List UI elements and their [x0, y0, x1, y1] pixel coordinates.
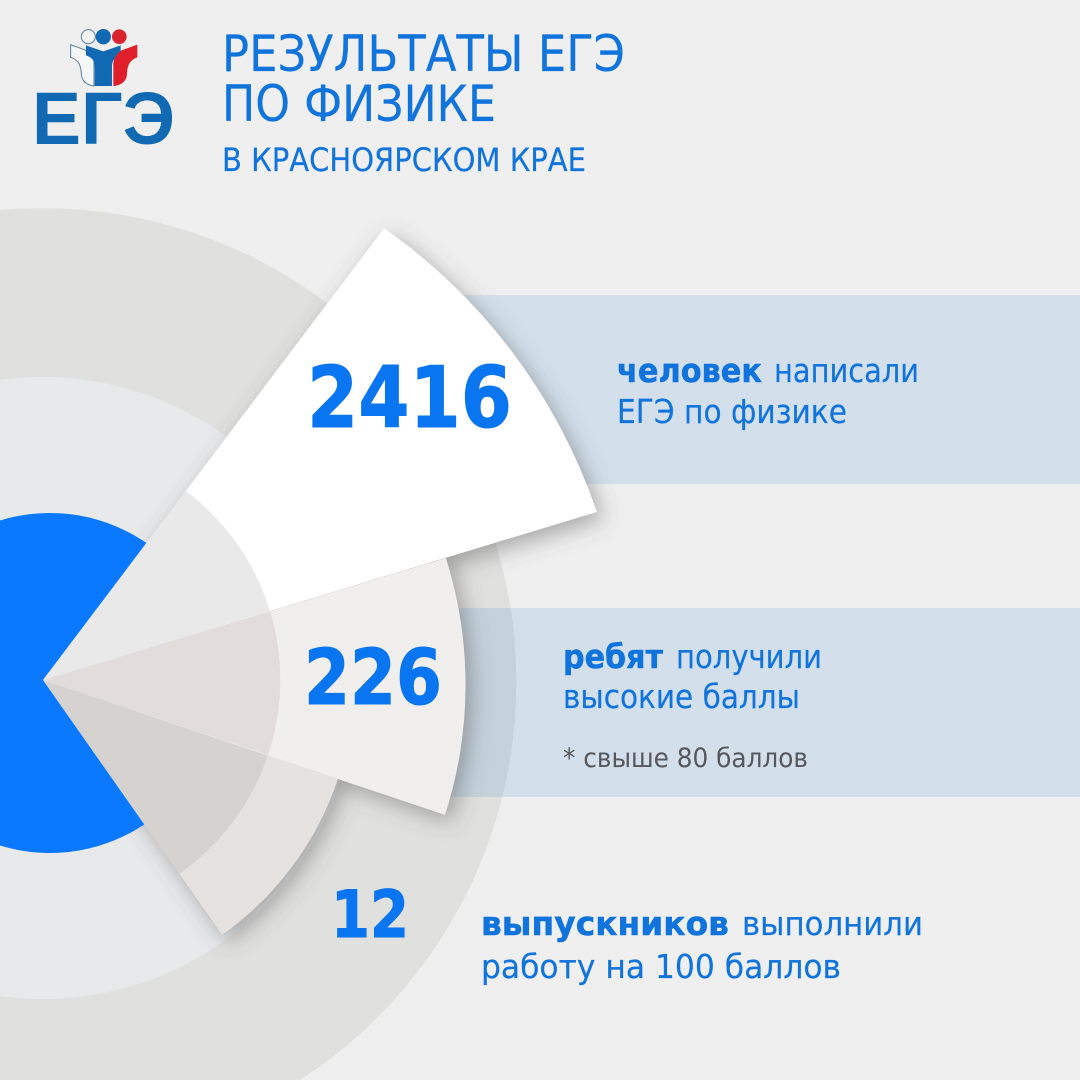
- logo: ЕГЭ emblem: [32, 29, 175, 160]
- text: first stat: написали: [774, 351, 919, 390]
- sector: 226 students: [43, 558, 466, 815]
- text: first stat: [617, 351, 919, 431]
- band: first stat background: [440, 295, 1080, 484]
- text: second stat: высокие баллы: [563, 677, 800, 716]
- sector: 2416 people: [43, 228, 597, 680]
- logo wordmark: ЕГЭ: [32, 77, 175, 160]
- text: third stat: выполнили: [742, 904, 923, 943]
- shadow beneath the sectors: [43, 228, 597, 935]
- text: second stat: [563, 637, 822, 716]
- text: third stat: выпускников: [481, 904, 729, 943]
- title: [222, 25, 625, 133]
- text: third stat: [481, 904, 923, 986]
- text: second stat: ребят: [563, 637, 663, 676]
- icon: three figures: [71, 29, 137, 86]
- blue central circle: [0, 513, 220, 853]
- ring: inner light circle: [0, 377, 354, 999]
- ring: outer gray circle: [0, 208, 516, 1080]
- text: first stat: человек: [617, 351, 762, 390]
- number: 226: 226: [304, 634, 442, 723]
- number: 2416: 2416: [307, 349, 512, 448]
- sector: 12 graduates: [43, 680, 338, 935]
- text: second stat: получили: [676, 637, 822, 676]
- footnote: * свыше 80 баллов: [563, 743, 808, 774]
- number: 12: 12: [331, 878, 409, 953]
- subtitle: В КРАСНОЯРСКОМ КРАЕ: [222, 141, 586, 179]
- title: ПО ФИЗИКЕ: [222, 75, 496, 133]
- text: third stat: работу на 100 баллов: [481, 947, 841, 986]
- title: РЕЗУЛЬТАТЫ ЕГЭ: [222, 25, 625, 83]
- text: first stat: ЕГЭ по физике: [617, 392, 847, 431]
- band: second stat background: [440, 608, 1080, 797]
